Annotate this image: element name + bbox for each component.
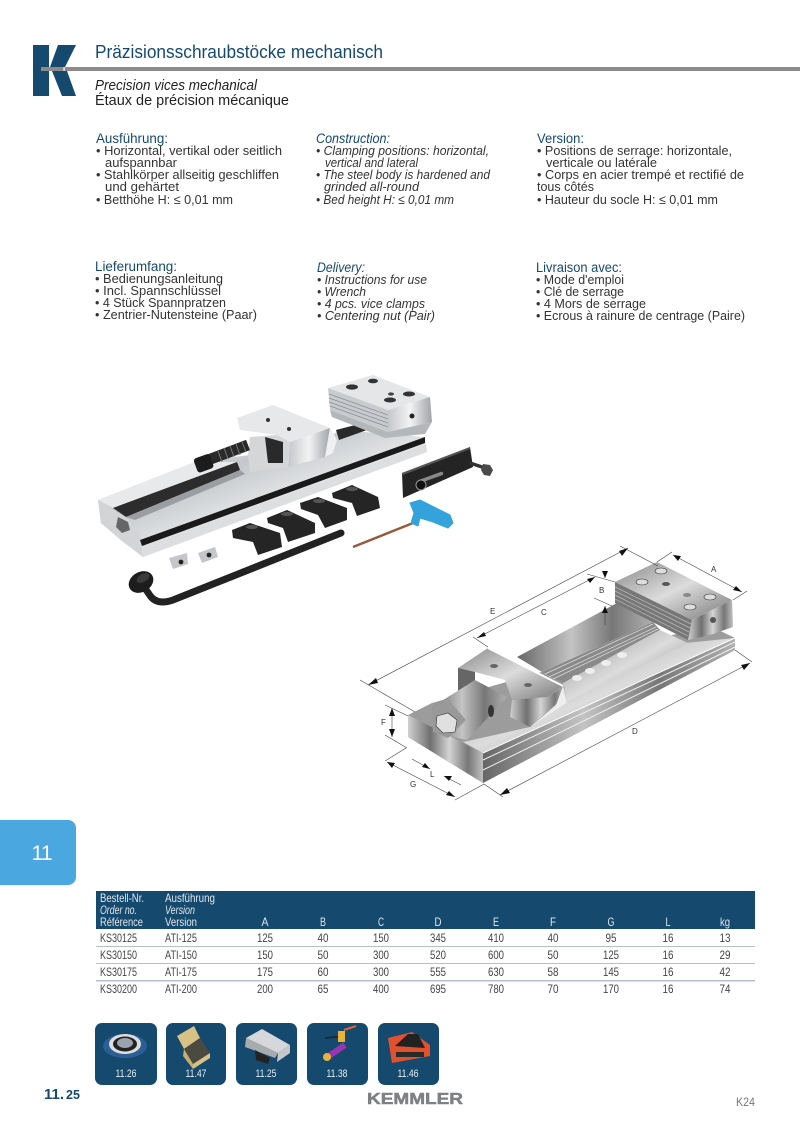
- text block: Construction: vertical and lateral: [325, 155, 419, 170]
- subtitle: English: Precision vices mechanical: [95, 78, 258, 94]
- dimension letters: E: [490, 607, 495, 616]
- dimension letters: G: [410, 780, 416, 789]
- table row KS30150: 16: [662, 948, 674, 962]
- table row KS30150: 520: [430, 948, 446, 962]
- text block: Version: • Positions de serrage: horizontale,: [537, 143, 732, 158]
- drawing slide surface: [517, 603, 688, 703]
- text block: Livraison avec: • 4 Mors de serrage: [536, 296, 646, 311]
- subtitle: French: Étaux de précision mécanique: [95, 92, 289, 109]
- text block: Construction: grinded all-round: [324, 179, 420, 194]
- dimension letters: [381, 565, 717, 789]
- table header: C: [378, 915, 384, 929]
- fixed jaw: [328, 375, 432, 438]
- table header: B: [320, 915, 326, 929]
- specification table: [96, 891, 755, 996]
- table header: A: [262, 915, 268, 929]
- moving jaw: [237, 405, 337, 472]
- four vice clamps: [232, 485, 380, 555]
- table row KS30175: KS30175: [100, 965, 137, 979]
- table row KS30125: 40: [548, 931, 559, 945]
- text block: Ausführung: und gehärtet: [105, 179, 179, 194]
- table row KS30125: 345: [430, 931, 446, 945]
- table row KS30200: [100, 982, 731, 996]
- table row KS30175: [100, 965, 731, 979]
- page code: K24: [736, 1095, 755, 1109]
- text block: Construction: Construction:: [316, 131, 390, 146]
- table row KS30200: 200: [257, 982, 273, 996]
- table row KS30125: ATI-125: [165, 931, 197, 945]
- table row KS30150: KS30150: [100, 948, 137, 962]
- text block: Delivery: • Wrench: [317, 284, 366, 299]
- text block: Delivery: • 4 pcs. vice clamps: [317, 296, 425, 311]
- logo: K mark: [33, 45, 76, 96]
- header rule: [41, 67, 800, 71]
- table row lines: [96, 946, 755, 982]
- table row KS30175: 58: [548, 965, 559, 979]
- dimension letters: B: [599, 586, 604, 595]
- chapter tab: [0, 820, 76, 885]
- text block: Lieferumfang: • Bedienungsanleitung: [95, 271, 223, 286]
- dimension letters: D: [632, 727, 638, 736]
- text block: Livraison avec: • Ecrous à rainure de centrage (Paire): [536, 308, 745, 323]
- text block: Version: [537, 131, 744, 207]
- dimension letters: C: [541, 608, 547, 617]
- table row KS30125: 410: [488, 931, 504, 945]
- thumbnail: box 11.47: [166, 1023, 226, 1085]
- text block: Ausführung: • Stahlkörper allseitig geschliffen: [96, 167, 279, 182]
- table row KS30125: [100, 931, 731, 945]
- text block: Version: Version:: [537, 131, 584, 146]
- clamp plate with bolt: [402, 447, 493, 498]
- table header: [96, 891, 755, 929]
- table header: G: [608, 915, 614, 929]
- table header: Version: [165, 915, 197, 929]
- table row KS30150: 29: [720, 948, 731, 962]
- thumbnail: vice 11.25: 11.25: [256, 1068, 276, 1080]
- text block: Delivery: [317, 260, 435, 323]
- drawing base: [408, 625, 735, 783]
- table row KS30200: 74: [720, 982, 731, 996]
- thumbnail: vice 11.25: [236, 1023, 297, 1085]
- vice base: [98, 423, 427, 557]
- text block: Lieferumfang: [95, 259, 257, 322]
- text block: Lieferumfang: Lieferumfang:: [95, 259, 177, 274]
- dimension letters: A: [711, 565, 717, 574]
- page number: 25: [66, 1088, 80, 1102]
- table row KS30150: 600: [488, 948, 504, 962]
- table row KS30200: 65: [318, 982, 329, 996]
- table row KS30200: 16: [662, 982, 674, 996]
- table row KS30150: 50: [548, 948, 559, 962]
- text block: Version: • Corps en acier trempé et rectifié de: [537, 167, 744, 182]
- technical drawing: dimensioned vice: [360, 546, 752, 800]
- two centering nuts: [169, 547, 218, 569]
- table row KS30200: 695: [430, 982, 446, 996]
- table row KS30150: [100, 948, 731, 962]
- text block: Construction: • Bed height H: ≤ 0,01 mm: [316, 192, 454, 207]
- text block: Version: tous côtés: [537, 179, 594, 194]
- table row KS30200: KS30200: [100, 982, 137, 996]
- brand name: KEMMLER: [367, 1091, 464, 1108]
- text block: Ausführung: • Betthöhe H: ≤ 0,01 mm: [96, 192, 233, 207]
- text block: Lieferumfang: • Incl. Spannschlüssel: [95, 283, 221, 298]
- text block: Delivery: Delivery:: [317, 260, 365, 275]
- table header: L: [666, 915, 671, 929]
- text block: Ausführung: Ausführung:: [96, 131, 168, 146]
- table header: Référence: [100, 915, 143, 929]
- dimension arrowheads: [368, 548, 750, 797]
- text block: Lieferumfang: • 4 Stück Spannpratzen: [95, 295, 226, 310]
- table row KS30150: 50: [318, 948, 329, 962]
- table row KS30175: 175: [257, 965, 273, 979]
- product photo: precision vice with accessories: [98, 375, 493, 602]
- chapter tab: 11: [32, 842, 52, 865]
- text block: Construction: [316, 131, 491, 207]
- thumbnail: rotary base 11.26: 11.26: [116, 1068, 136, 1080]
- thumbnail: box 11.47: 11.47: [186, 1068, 206, 1080]
- thumbnail: clamping set 11.46: 11.46: [398, 1068, 418, 1080]
- table row KS30125: 40: [318, 931, 329, 945]
- text block: Livraison avec: [536, 260, 745, 323]
- table row KS30150: 300: [373, 948, 389, 962]
- table row KS30175: 630: [488, 965, 504, 979]
- text block: Ausführung: • Horizontal, vertikal oder seitlich: [96, 143, 282, 158]
- table row KS30125: 150: [373, 931, 389, 945]
- table row KS30125: 16: [662, 931, 674, 945]
- dimension lines: [360, 546, 752, 800]
- text block: Delivery: • Instructions for use: [317, 272, 427, 287]
- thumbnail: clamp 11.38: [307, 1023, 368, 1085]
- text block: Delivery: • Centering nut (Pair): [317, 308, 435, 323]
- table row KS30125: 95: [606, 931, 617, 945]
- table row KS30150: ATI-150: [165, 948, 197, 962]
- table row KS30200: 70: [548, 982, 559, 996]
- table header: F: [550, 915, 556, 929]
- text block: Livraison avec: Livraison avec:: [536, 260, 622, 275]
- wrench handle: [125, 533, 341, 602]
- table row KS30200: 170: [603, 982, 619, 996]
- thumbnail: clamp 11.38: 11.38: [326, 1068, 348, 1080]
- table header: kg: [720, 915, 730, 929]
- table row KS30150: 125: [603, 948, 619, 962]
- hex key with blue handle: [353, 500, 453, 547]
- table row KS30175: 555: [430, 965, 446, 979]
- text block: Ausführung: aufspannbar: [105, 155, 178, 170]
- thumbnail: clamping set 11.46: [378, 1023, 439, 1085]
- page number: 11.: [44, 1086, 64, 1103]
- thumbnail: rotary base 11.26: [95, 1023, 157, 1085]
- table row KS30175: 60: [318, 965, 329, 979]
- text block: Livraison avec: • Clé de serrage: [536, 284, 624, 299]
- table header: Ausführung: [165, 891, 215, 905]
- table header: E: [493, 915, 499, 929]
- text block: Livraison avec: • Mode d'emploi: [536, 272, 624, 287]
- table row KS30150: 150: [257, 948, 273, 962]
- text block: Version: verticale ou latérale: [546, 155, 657, 170]
- title: Präzisionsschraubstöcke mechanisch: [95, 42, 383, 62]
- table row KS30175: 300: [373, 965, 389, 979]
- drawing moving jaw: [432, 648, 567, 740]
- table row KS30200: 400: [373, 982, 389, 996]
- drawing fixed jaw: [615, 562, 733, 640]
- table row KS30175: 145: [603, 965, 619, 979]
- text block: Construction: • The steel body is hardened and: [316, 167, 491, 182]
- table header: Version: [165, 903, 195, 917]
- dimension letters: L: [430, 770, 435, 779]
- table row KS30200: ATI-200: [165, 982, 197, 996]
- spindle and bolt: [193, 442, 248, 473]
- text block: Version: • Hauteur du socle H: ≤ 0,01 mm: [537, 192, 718, 207]
- table header: D: [434, 915, 442, 929]
- page number: [44, 1086, 80, 1103]
- table row KS30125: KS30125: [100, 931, 137, 945]
- table row KS30175: 16: [662, 965, 674, 979]
- table row KS30125: 13: [720, 931, 731, 945]
- text block: Lieferumfang: • Zentrier-Nutensteine (Paar): [95, 307, 257, 322]
- table header: Order no.: [100, 903, 137, 917]
- table header: Bestell-Nr.: [100, 891, 144, 905]
- table row KS30125: 125: [257, 931, 273, 945]
- table row KS30175: ATI-175: [165, 965, 197, 979]
- table row KS30175: 42: [720, 965, 731, 979]
- table row KS30200: 780: [488, 982, 504, 996]
- dimension letters: F: [381, 718, 386, 727]
- text block: Ausführung: [96, 131, 282, 207]
- text block: Construction: • Clamping positions: horizontal,: [316, 143, 489, 158]
